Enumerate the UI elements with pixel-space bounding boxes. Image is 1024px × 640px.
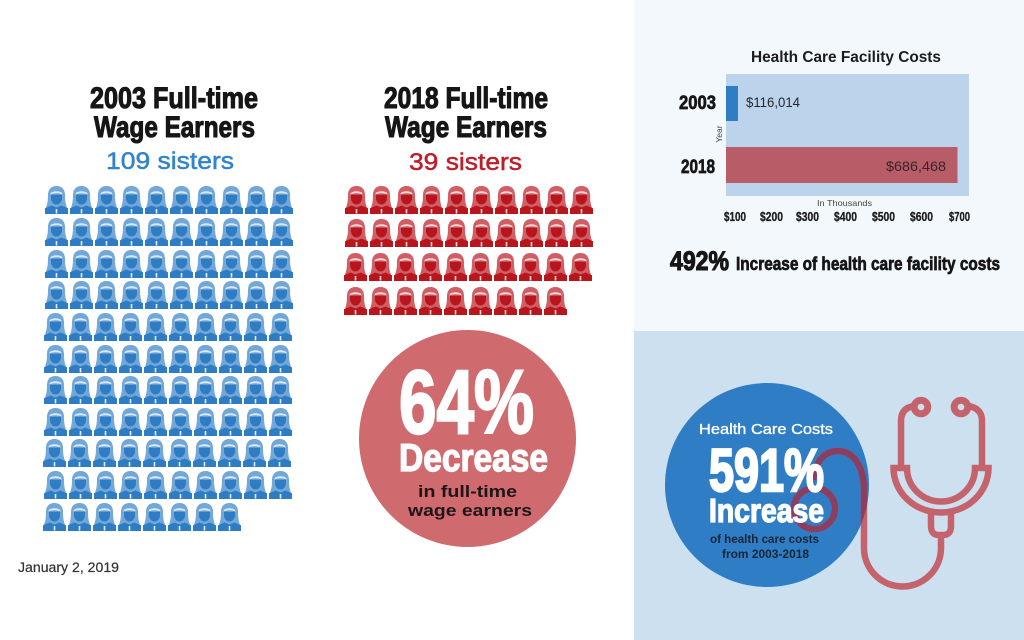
axis title: in thousands: In Thousands — [817, 198, 872, 208]
panel: health care costs background — [634, 331, 1024, 640]
statement: 492% increase — [670, 246, 1000, 276]
heading: 2018 full-time wage earners: Wage Earners — [385, 111, 547, 144]
x axis labels: $300 — [796, 209, 819, 224]
axis title: year: Year — [714, 125, 724, 143]
x axis labels: $500 — [872, 209, 895, 224]
heading: 2003 full-time wage earners: 2003 Full-time — [90, 82, 258, 115]
callout text: 591% increase: of health care costs — [710, 534, 819, 546]
icon: stethoscope — [794, 400, 988, 586]
callout: 64% decrease: in full-time — [418, 482, 517, 501]
heading: 2018 full-time wage earners: 2018 Full-time — [384, 82, 548, 115]
bar chart: facility costs — [679, 74, 970, 224]
heading: 2018 full-time wage earners — [384, 82, 548, 144]
bar: 2003 — [726, 86, 738, 121]
heading: 2003 full-time wage earners — [90, 82, 258, 144]
x axis labels: $100 — [724, 209, 746, 224]
callout: 64% decrease: Decrease — [399, 437, 548, 480]
chart title: Health Care Facility Costs — [751, 49, 941, 66]
panel: left white background — [0, 0, 634, 640]
category label: 2003: 2003 — [679, 93, 716, 114]
callout text: 591% increase — [699, 421, 833, 561]
callout: 64% decrease: wage earners — [407, 501, 532, 520]
callout: 64% decrease — [359, 330, 576, 547]
text: 39 sisters: 39 sisters — [409, 149, 522, 176]
text: 109 sisters: 109 sisters — [106, 148, 234, 175]
category label: 2018: 2018 — [681, 157, 715, 178]
heading: 2003 full-time wage earners: Wage Earners — [94, 111, 255, 144]
callout text: 591% increase: Health Care Costs — [699, 421, 833, 438]
x axis labels: $400 — [834, 209, 857, 224]
pictogram: 39 red sisters — [344, 186, 593, 315]
callout text: 591% increase: 591% — [709, 437, 824, 504]
text: date: January 2, 2019 — [18, 560, 119, 575]
value: 2003: $116,014 — [746, 94, 800, 110]
callout: 64% decrease: 64% — [399, 353, 534, 453]
x axis labels: $600 — [910, 209, 933, 224]
callout text: 591% increase: from 2003-2018 — [722, 549, 810, 561]
statement: 492% increase: 492% — [670, 246, 729, 276]
x axis labels: $200 — [760, 209, 783, 224]
panel: health care facility costs background — [634, 0, 1024, 331]
value: 2018: $686,468 — [886, 158, 946, 174]
bar: 2018 — [726, 147, 958, 183]
callout text: 591% increase: Increase — [709, 492, 824, 529]
callout circle: health care costs — [665, 383, 869, 587]
pictogram: 109 blue sisters — [43, 186, 293, 531]
x axis labels — [724, 209, 970, 224]
x axis labels: $700 — [949, 209, 970, 224]
